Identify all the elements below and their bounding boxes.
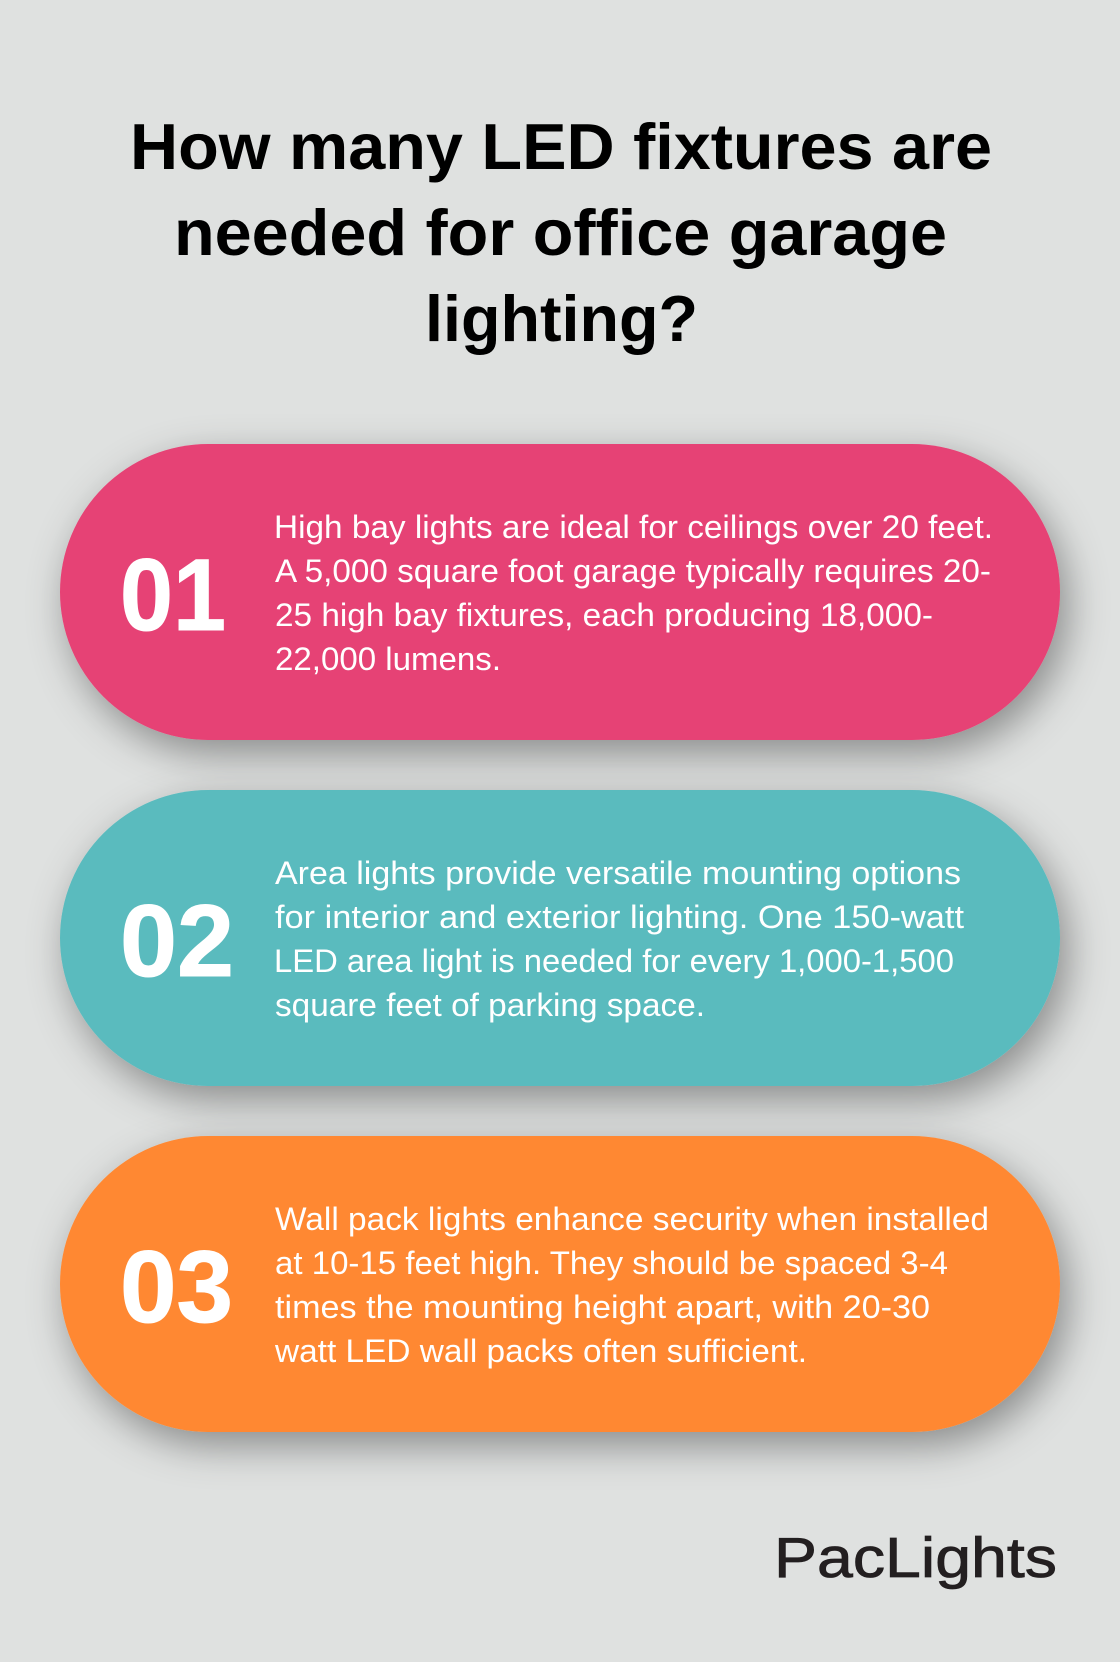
- pill background orange: [60, 1136, 1060, 1432]
- panel: step 03: [60, 1136, 1060, 1432]
- pill background teal: [60, 790, 1060, 1086]
- text block: high bay lights: 22,000 lumens.: [275, 641, 501, 677]
- number 02: 02: [120, 884, 234, 998]
- text block: wall pack lights: [274, 1201, 989, 1369]
- logo: PacLights: PacLights: [774, 1526, 1057, 1590]
- text block: wall pack lights: at 10-15 feet high. They should be spaced 3-4: [275, 1245, 948, 1281]
- text block: high bay lights: High bay lights are ideal for ceilings over 20 feet.: [274, 509, 993, 545]
- pill background pink: [60, 444, 1060, 740]
- title: lighting?: [425, 282, 698, 355]
- text block: area lights: [274, 855, 964, 1023]
- number 03: 03: [120, 1230, 233, 1344]
- title: needed for office garage: [174, 196, 947, 269]
- text block: wall pack lights: Wall pack lights enhance security when installed: [275, 1201, 989, 1237]
- text block: area lights: square feet of parking space.: [275, 987, 705, 1023]
- text block: area lights: Area lights provide versatile mounting options: [275, 855, 961, 891]
- text block: area lights: LED area light is needed for every 1,000-1,500: [274, 943, 954, 979]
- text block: area lights: for interior and exterior lighting. One 150-watt: [275, 899, 964, 935]
- panel: step 01: [60, 444, 1060, 740]
- text block: high bay lights: 25 high bay fixtures, each producing 18,000-: [275, 597, 933, 633]
- text block: wall pack lights: watt LED wall packs often sufficient.: [274, 1333, 807, 1369]
- title: [130, 110, 992, 355]
- number 01: 01: [120, 538, 226, 652]
- text block: wall pack lights: times the mounting height apart, with 20-30: [275, 1289, 930, 1325]
- title: How many LED fixtures are: [130, 110, 992, 183]
- panel: step 02: [60, 790, 1060, 1086]
- text block: high bay lights: [274, 509, 993, 677]
- text block: high bay lights: A 5,000 square foot garage typically requires 20-: [275, 553, 991, 589]
